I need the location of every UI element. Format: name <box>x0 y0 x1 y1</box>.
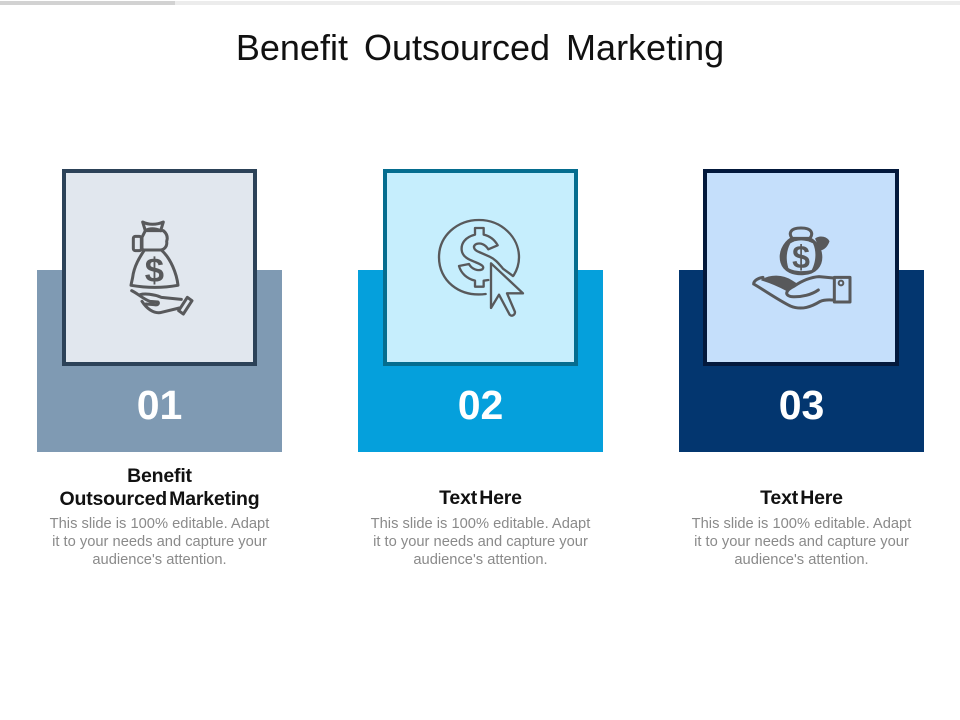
panel 1 icon box <box>62 169 257 366</box>
heading 1: Outsourced Marketing <box>60 488 259 510</box>
icon: money bag over open hand with cuff: $ <box>792 239 810 275</box>
text block 1: it to your needs and capture your <box>52 534 267 550</box>
text block 1 <box>50 516 270 568</box>
icon: money bag over open hand with cuff <box>752 226 852 310</box>
number 01: 01 <box>137 382 182 428</box>
text block 2 <box>370 516 590 568</box>
panel 3 base band <box>679 270 924 452</box>
top progress bar <box>0 1 960 5</box>
title: Benefit Outsourced Marketing <box>236 27 724 68</box>
text block 3 <box>692 516 912 568</box>
text block 1: audience's attention. <box>92 552 227 568</box>
heading 1: Benefit <box>127 465 192 487</box>
icon: money bag held over open hand <box>130 220 194 316</box>
icon: money bag held over open hand: $ <box>145 252 164 290</box>
number 03: 03 <box>779 382 824 428</box>
text block 2: This slide is 100% editable. Adapt <box>371 516 590 532</box>
heading 2: Text Here <box>439 487 522 509</box>
heading 1 <box>60 465 259 510</box>
text block 2: it to your needs and capture your <box>373 534 588 550</box>
heading 3: Text Here <box>760 487 843 509</box>
text block 3: This slide is 100% editable. Adapt <box>692 516 911 532</box>
panel 1 base band <box>37 270 282 452</box>
icon: dollar coin with cursor <box>438 218 524 317</box>
text block 3: audience's attention. <box>734 552 869 568</box>
panel 2 icon box <box>383 169 578 366</box>
text block 1: This slide is 100% editable. Adapt <box>50 516 269 532</box>
text block 3: it to your needs and capture your <box>694 534 909 550</box>
number 02: 02 <box>458 382 503 428</box>
panel 2 base band <box>358 270 603 452</box>
text block 2: audience's attention. <box>413 552 548 568</box>
panel 3 icon box <box>703 169 899 366</box>
